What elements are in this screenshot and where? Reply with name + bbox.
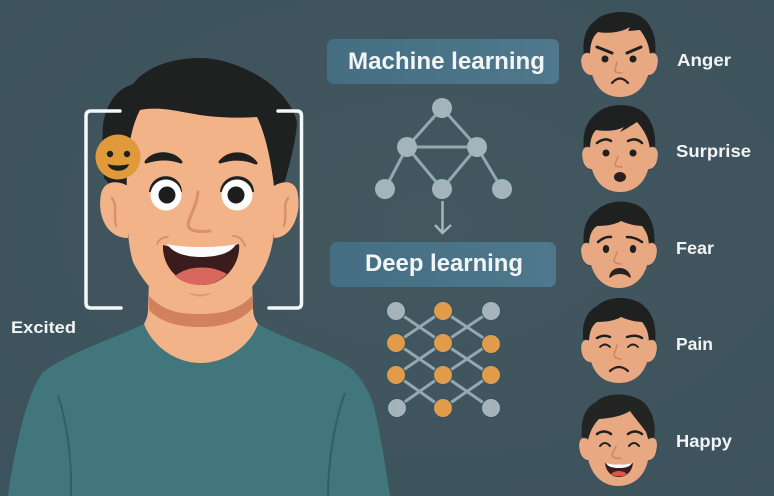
machine learning network diagram xyxy=(375,98,512,199)
face xyxy=(127,109,275,313)
label: Happy: Happy xyxy=(676,431,732,451)
label: Fear: Fear xyxy=(676,238,714,258)
emotion face: pain xyxy=(581,298,657,383)
emotion face: anger xyxy=(581,12,658,97)
label: Pain: Pain xyxy=(676,334,713,354)
heading: Deep learning xyxy=(330,242,556,287)
smile creases xyxy=(157,236,245,246)
emotion face: surprise xyxy=(582,105,658,192)
emotion face: happy xyxy=(579,395,657,486)
left ear xyxy=(100,182,128,238)
heading: Deep learning: Deep learning xyxy=(365,250,523,277)
main character: excited man xyxy=(8,58,390,496)
emotion face: fear xyxy=(581,202,657,288)
arrow: machine learning to deep learning xyxy=(435,201,451,233)
neck xyxy=(144,280,258,363)
hair xyxy=(102,58,297,200)
heading: Machine learning: Machine learning xyxy=(348,48,545,75)
right ear xyxy=(274,182,299,238)
nose xyxy=(188,192,210,231)
face detection bracket: left xyxy=(86,111,121,308)
label: Excited: Excited xyxy=(11,318,76,337)
face detection bracket: right xyxy=(269,111,302,308)
chin mark xyxy=(188,292,212,296)
heading: Machine learning xyxy=(327,39,559,84)
deep learning network diagram xyxy=(386,302,500,418)
open mouth xyxy=(163,244,239,285)
left eye xyxy=(149,176,182,210)
shirt xyxy=(8,324,390,496)
left eyebrow xyxy=(146,154,181,162)
icon: smiley emoji xyxy=(96,134,140,180)
right eyebrow xyxy=(220,154,256,163)
right eye xyxy=(220,176,254,210)
label: Anger: Anger xyxy=(677,50,731,70)
label: Surprise: Surprise xyxy=(676,141,751,161)
